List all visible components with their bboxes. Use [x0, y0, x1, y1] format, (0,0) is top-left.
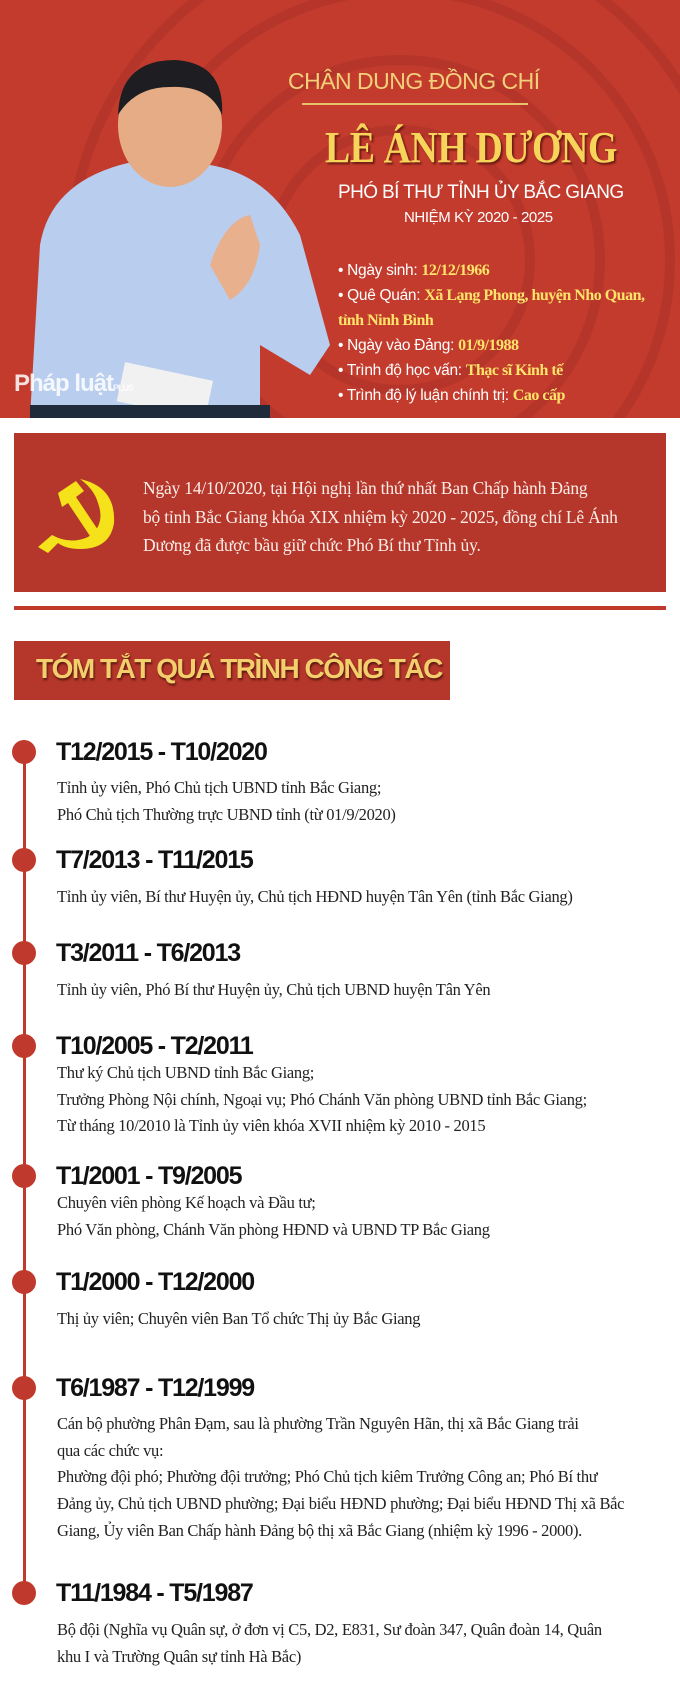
item 2001-2005: Phó Văn phòng, Chánh Văn phòng HĐND và UBND TP Bắc Giang	[57, 1220, 490, 1239]
item 2000: Thị ủy viên; Chuyên viên Ban Tổ chức Thị ủy Bắc Giang	[57, 1309, 420, 1328]
item 2013-2015	[12, 846, 573, 906]
item 1987-1999: Cán bộ phường Phân Đạm, sau là phường Trần Nguyên Hãn, thị xã Bắc Giang trải	[57, 1414, 579, 1433]
bio info list	[338, 262, 644, 404]
item 1987-1999: Phường đội phó; Phường đội trưởng; Phó Chủ tịch kiêm Trưởng Công an; Phó Bí thư	[57, 1467, 597, 1486]
bio info list: • Trình độ lý luận chính trị: Cao cấp	[338, 387, 565, 404]
term: NHIỆM KỲ 2020 - 2025	[404, 209, 553, 226]
item 2015-2020: Phó Chủ tịch Thường trực UBND tỉnh (từ 01/9/2020)	[57, 805, 396, 824]
announcement panel	[14, 433, 666, 592]
photo: person	[30, 60, 330, 418]
subtitle position: PHÓ BÍ THƯ TỈNH ỦY BẮC GIANG	[338, 182, 624, 203]
announcement text	[143, 478, 618, 555]
item 2005-2011	[12, 1032, 587, 1135]
item 1984-1987: Bộ đội (Nghĩa vụ Quân sự, ở đơn vị C5, D2, E831, Sư đoàn 347, Quân đoàn 14, Quân	[57, 1620, 602, 1639]
icon: hammer and sickle	[38, 479, 114, 553]
item 1987-1999: Giang, Ủy viên Ban Chấp hành Đảng bộ thị xã Bắc Giang (nhiệm kỳ 1996 - 2000).	[57, 1521, 582, 1540]
announcement text: Ngày 14/10/2020, tại Hội nghị lần thứ nhất Ban Chấp hành Đảng	[143, 478, 587, 498]
decorative drum pattern	[73, 0, 680, 418]
bio info list: tỉnh Ninh Bình	[338, 312, 433, 329]
bio info list: • Ngày sinh: 12/12/1966	[338, 262, 489, 279]
timeline	[12, 738, 624, 1666]
item 2001-2005	[12, 1162, 490, 1239]
item 2015-2020: Tỉnh ủy viên, Phó Chủ tịch UBND tỉnh Bắc Giang;	[57, 778, 381, 797]
item 2011-2013: T3/2011 - T6/2013	[56, 939, 240, 967]
item 2011-2013	[12, 939, 490, 999]
header panel	[0, 0, 680, 418]
item 2000	[12, 1268, 420, 1328]
title block: CHÂN DUNG ĐỒNG CHÍ	[288, 68, 540, 94]
item 2005-2011: T10/2005 - T2/2011	[56, 1032, 253, 1060]
bio info list: • Trình độ học vấn: Thạc sĩ Kinh tế	[338, 362, 563, 379]
item 1987-1999: qua các chức vụ:	[57, 1441, 163, 1460]
bio info list: • Quê Quán: Xã Lạng Phong, huyện Nho Quan,	[338, 287, 644, 304]
item 2001-2005: T1/2001 - T9/2005	[56, 1162, 241, 1190]
section title: Tóm tắt quá trình công tác: TÓM TẮT QUÁ TRÌNH CÔNG TÁC	[36, 653, 442, 684]
item 1987-1999	[12, 1374, 624, 1540]
item 1984-1987: T11/1984 - T5/1987	[56, 1579, 253, 1607]
item 2015-2020	[12, 738, 396, 824]
item 2013-2015: Tỉnh ủy viên, Bí thư Huyện ủy, Chủ tịch HĐND huyện Tân Yên (tỉnh Bắc Giang)	[57, 887, 573, 906]
bio info list: • Ngày vào Đảng: 01/9/1988	[338, 337, 518, 354]
logo: Pháp luật Plus: Pháp luậtPLUS	[14, 370, 133, 397]
announcement text: Dương đã được bầu giữ chức Phó Bí thư Tỉnh ủy.	[143, 535, 481, 555]
item 1984-1987	[12, 1579, 602, 1666]
item 2013-2015: T7/2013 - T11/2015	[56, 846, 253, 874]
section title: Tóm tắt quá trình công tác	[14, 641, 450, 700]
item 1984-1987: khu I và Trường Quân sự tỉnh Hà Bắc)	[57, 1647, 301, 1666]
item 2000: T1/2000 - T12/2000	[56, 1268, 254, 1296]
item 2011-2013: Tỉnh ủy viên, Phó Bí thư Huyện ủy, Chủ tịch UBND huyện Tân Yên	[57, 980, 490, 999]
item 1987-1999: Đảng ủy, Chủ tịch UBND phường; Đại biểu HĐND phường; Đại biểu HĐND Thị xã Bắc	[57, 1494, 624, 1513]
announcement text: bộ tỉnh Bắc Giang khóa XIX nhiệm kỳ 2020 - 2025, đồng chí Lê Ánh	[143, 506, 618, 526]
item 2005-2011: Thư ký Chủ tịch UBND tỉnh Bắc Giang;	[57, 1063, 314, 1082]
item 2005-2011: Từ tháng 10/2010 là Tỉnh ủy viên khóa XVII nhiệm kỳ 2010 - 2015	[57, 1116, 485, 1135]
name heading: LÊ ÁNH DƯƠNG	[325, 123, 617, 172]
item 1987-1999: T6/1987 - T12/1999	[56, 1374, 254, 1402]
item 2001-2005: Chuyên viên phòng Kế hoạch và Đầu tư;	[57, 1193, 316, 1212]
item 2005-2011: Trưởng Phòng Nội chính, Ngoại vụ; Phó Chánh Văn phòng UBND tỉnh Bắc Giang;	[57, 1090, 587, 1109]
item 2015-2020: T12/2015 - T10/2020	[56, 738, 267, 766]
